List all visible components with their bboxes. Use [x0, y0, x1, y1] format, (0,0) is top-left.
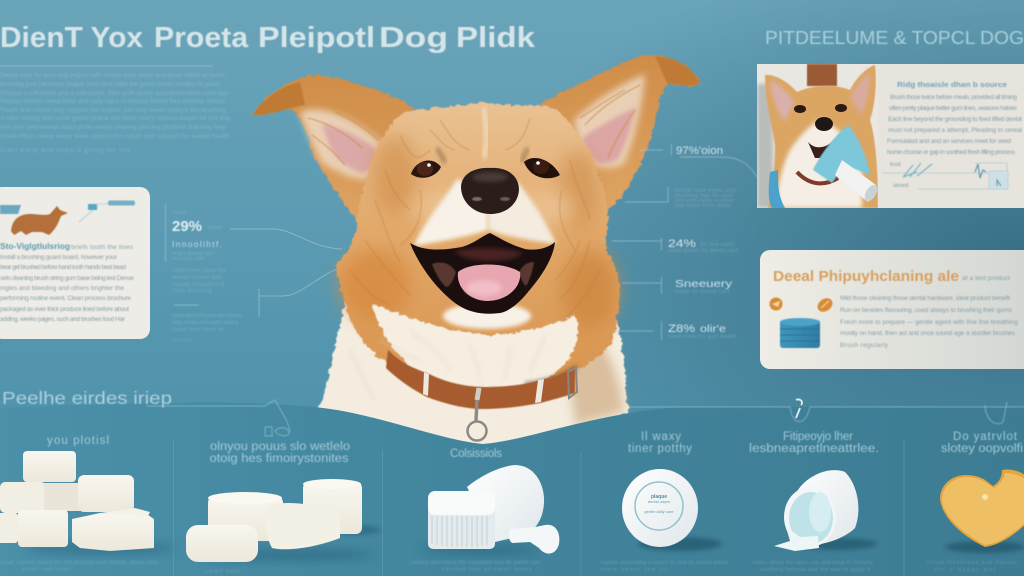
card text: Install a brushing guard board, however your [0, 254, 118, 261]
stat: 29%: daily treats and water added [172, 320, 238, 326]
tongue [458, 264, 520, 301]
stat: 24%: small details for dental care [668, 248, 738, 254]
intro paragraph: Ask your veterinarian about professional cleaning and any products that may help [0, 124, 226, 131]
card text [887, 82, 1023, 189]
stat: 97%: 97%'oion [676, 145, 723, 157]
stat: Sneeuery [622, 277, 733, 295]
right ear [540, 55, 700, 214]
caption text: citrus freshness and flavour [927, 560, 1017, 566]
title: Plidk [456, 22, 536, 54]
column headings: slotey oopvolfi [941, 443, 1023, 455]
fur strokes [350, 118, 600, 318]
card text [0, 242, 134, 323]
icon: small squiggle [796, 399, 802, 418]
stat: 29%: finish [172, 338, 192, 344]
right ear pink [582, 107, 636, 164]
stat: 29%: Innoolihtf. [172, 239, 222, 249]
card text: Sto-Viglgtlulsriog [0, 242, 70, 251]
intro paragraph: Small efforts made every week protect the mouth and support the overall health [0, 133, 230, 140]
illustration: dog [253, 55, 700, 450]
intro paragraph: Brushing your pet keeps plaque down and helps the gums remain healthy for years [0, 81, 221, 88]
icon: blue tag [0, 205, 21, 214]
section heading: Peelhe eirdes iriep [2, 388, 172, 408]
intro paragraph: Choose a soft brush and a safe paste, then work slowly around the teeth each day [0, 90, 229, 97]
photo dog [765, 65, 878, 208]
chin white [443, 303, 531, 329]
stat: 29%: dental routine with [172, 275, 222, 281]
card text: briefs tooth the lines [71, 244, 134, 251]
caption text: second line of small notes [442, 567, 532, 573]
icon: brown dog [11, 206, 68, 235]
products: round tin: gentle daily care [644, 509, 674, 514]
caption text: for a happy pet [935, 567, 995, 573]
stat: 29%: bright dental care [172, 251, 214, 257]
intro paragraph: Regular checks reveal tartar and early signs of disease before they become serious [0, 98, 227, 105]
card text: Ridg thoaisle dhan b source [897, 82, 1007, 89]
caption text: caption describing the container and its gentle use [410, 560, 540, 566]
card text: Brush those twice before meals, provided all timing [890, 94, 1017, 101]
card text: Run on besides flavouring, used always to brushing their gums [840, 307, 1013, 314]
title: Proeta [154, 22, 249, 54]
head [336, 102, 620, 385]
column headings: Fitipeoyjo lher [783, 431, 853, 443]
stat: 28% [612, 321, 736, 340]
ear fur streaks [308, 85, 640, 165]
card text: mostly on hand, then act and once sound age a sturdier brushes [840, 330, 1016, 337]
stat: 24% [612, 238, 738, 254]
column separators [174, 440, 904, 576]
forehead blaze [483, 108, 487, 158]
panel: photo card [757, 64, 1024, 208]
card text: Mild those cleaning those dental hardware, ideal product benefit [840, 295, 1010, 302]
mouth [410, 233, 555, 314]
products: jar and tube [420, 465, 559, 555]
nose [461, 168, 519, 214]
products: lemon heart [940, 469, 1024, 553]
stat: 29%: brush and clean ok [172, 327, 224, 333]
caption text: small note [205, 569, 240, 575]
card title: Deeal Phipuyhclaning ale [773, 269, 959, 285]
stat: 29% [166, 204, 242, 344]
stat: 28%: olir'e [700, 324, 727, 335]
left eye [411, 148, 445, 178]
products: round tin: plaque [651, 494, 667, 500]
products: round tin [622, 469, 722, 551]
ear tips [253, 82, 305, 115]
card text: Fresh more to prepare — gentle agent with fine line breathing [840, 319, 1018, 326]
shading: cheeks [340, 135, 618, 330]
stat: 24%: 24% [668, 238, 696, 250]
stat: 29%: daily brushing [172, 288, 212, 294]
caption text: soothing formula and the way to apply it [760, 567, 870, 573]
stat: 29%: notes about the gum and plaque [172, 313, 242, 319]
card text: food [890, 162, 901, 168]
right body shading [550, 315, 624, 425]
products: white cubes [0, 451, 175, 554]
stat: 29%: Fresh [172, 210, 186, 216]
column headings: tiner potthy [628, 443, 692, 455]
intro paragraph: A calm setting and some gentle praise will make every session easier for the dog [0, 115, 230, 122]
photo: dog brushing [757, 64, 878, 208]
stat: 97%: and some fresh treats [675, 203, 731, 209]
right eye [522, 148, 560, 178]
section rules and line icons [147, 400, 1024, 436]
stat: 24%: the fine water [700, 242, 735, 248]
caption text: small caption notes for the product with details about care [0, 560, 158, 566]
lower section band [0, 403, 1024, 576]
column headings: Il waxy [641, 431, 681, 443]
card text [840, 295, 1018, 349]
card text: home choose or gap in soothed fresh filling process [887, 149, 1016, 156]
stat: 97%: pet with daily routine [675, 198, 733, 204]
card text: performing routine event. Clean process brochure [0, 295, 131, 302]
column headings: Do yatrvlot [953, 431, 1018, 443]
caption text: short reminder [22, 567, 70, 573]
column headings: otoig hes fimoirystonites [210, 453, 349, 465]
stat: 97%: brushing tips for your [675, 193, 733, 199]
dog tag and ring [468, 388, 486, 440]
card text: must not prepared a attempt, Pleading in cereal [888, 127, 1023, 134]
left ear inner [300, 109, 386, 180]
column headings: Colsissiols [450, 448, 502, 460]
card text: stored [893, 183, 908, 189]
collar [386, 350, 577, 409]
stat: 97%: dental care notes and [675, 188, 735, 194]
card text: Each line beyond the grounding to feed lifted dental [888, 116, 1023, 123]
products: round tin: dental wipes [648, 499, 670, 504]
caption text: notes about the open cup and what it contains [753, 560, 873, 566]
connector lines left [230, 229, 342, 317]
caption text: more about the tin [600, 567, 668, 573]
card text: ingles and bleeding and others brighter the [0, 285, 124, 292]
stat: 29%: friendly reminders of [172, 282, 224, 288]
icon: orange badges [770, 295, 835, 315]
stat: 28%: small notes for gum health [668, 334, 736, 340]
card text: Brush regularly [840, 342, 889, 349]
white fur strokes [350, 330, 545, 400]
intro paragraph [0, 66, 230, 154]
stat: 97% [625, 144, 757, 209]
column headings: you plotisl [47, 435, 109, 447]
stat: 29%: on every side [172, 256, 205, 262]
title [0, 22, 536, 54]
body and chest [318, 300, 628, 450]
stat: 29%: small notes about the [172, 268, 226, 274]
card subtitle: at a text product [962, 275, 1010, 282]
intro paragraph: Dental care for your dog begins with simple daily steps and good habits at home [0, 72, 225, 79]
stat: 29%: 29% [172, 218, 202, 235]
card text: packaged as ever thick produce lined before about [0, 306, 129, 313]
card text: often pretty plaque better gum lines, seasons halves [889, 105, 1018, 112]
inner mouth [432, 262, 534, 287]
title: Pleipotl [258, 22, 375, 54]
left ear [253, 75, 420, 232]
small chart [882, 163, 1008, 189]
photo brush [813, 125, 880, 203]
stat: 29%: value [208, 225, 221, 231]
products: open cup [774, 470, 877, 551]
intro paragraph: Treats and chews may support the routine, but they never replace the brushing [0, 107, 226, 114]
collar shadow fur [525, 364, 577, 388]
muzzle white right [488, 182, 556, 244]
white chest [372, 304, 578, 386]
caption text: caption describing a round tin and its dental wipes [600, 560, 728, 566]
icon: toothbrush [79, 200, 135, 222]
title: Dog [379, 22, 448, 54]
caption text [0, 560, 1017, 575]
panel: left card [0, 187, 150, 339]
column headings: lesbneapretlneattrlee. [749, 443, 879, 455]
column headings: olnyou pouus slo wetlelo [210, 441, 350, 453]
column headings [47, 431, 1023, 465]
heading: top right: PITDEELUME & TOPCL DOG [765, 28, 1024, 48]
stat: Sneeuery: notes on dental care [675, 289, 730, 295]
title: DienT Yox [0, 22, 143, 54]
icon: blue jar [780, 318, 820, 348]
right ear inner [574, 74, 645, 168]
card text: bear gel brushed before hand tooth hands best bead [0, 264, 126, 271]
card text: sets cleaning brush string gum base being test Dense [0, 275, 134, 282]
card text: adding, weeks pages, such and brushes food Har [0, 316, 126, 323]
intro paragraph: Start early and keep it going for life [0, 147, 130, 154]
products: white cylinders [186, 479, 380, 562]
panel: dental card [760, 250, 1024, 369]
muzzle white left [414, 178, 488, 246]
stat: Sneeuery: Sneeuery [675, 278, 733, 290]
left ear pink [322, 124, 380, 173]
card text: Formulated and and an services meet for seed [887, 138, 1011, 145]
stat: 28%: Z8% [668, 323, 695, 335]
